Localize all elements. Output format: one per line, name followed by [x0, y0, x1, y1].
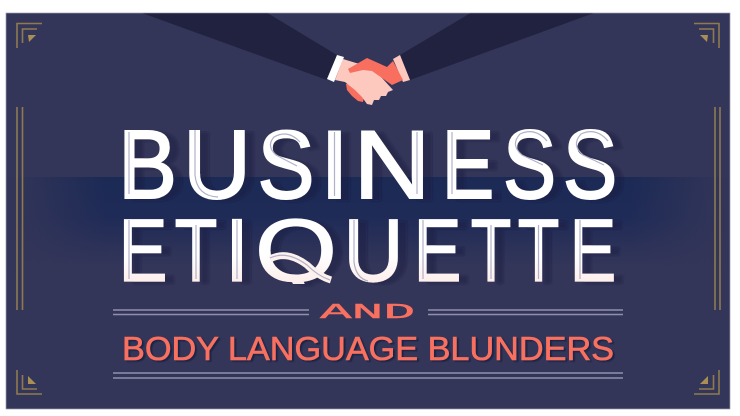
title: ETIQUETTE: T: [518, 200, 559, 300]
icon: handshake: [327, 55, 410, 105]
title: ETIQUETTE: I: [224, 201, 250, 301]
title: BUSINESS: E: [442, 110, 494, 219]
title: BUSINESS: B: [118, 110, 177, 219]
title: BUSINESS: S: [503, 111, 556, 219]
icon: right sleeve: [400, 13, 593, 80]
icon: left cuff: [327, 55, 344, 82]
title: ETIQUETTE: Q: [255, 200, 337, 300]
divider: bottom rules: [113, 373, 623, 378]
icon: bottom-left corner ornament: [17, 370, 42, 394]
icon: pale hand: [335, 59, 393, 105]
title detail: Q tail swash: [270, 256, 331, 280]
title: ETIQUETTE: E: [413, 202, 462, 301]
title: ETIQUETTE: [124, 218, 623, 286]
icon: top-left corner ornament: [17, 24, 42, 48]
subtitle: BODY LANGUAGE BLUNDERS: BODY LANGUAGE BLUNDERS: [122, 331, 614, 368]
right double rule: [715, 107, 720, 310]
title: BUSINESS: I: [319, 111, 350, 219]
title: BUSINESS: U: [183, 112, 251, 219]
icon: right cuff: [393, 55, 410, 82]
icon: coral back fingers: [346, 83, 364, 102]
divider: rules right of AND: [428, 310, 623, 314]
icon: top-right corner ornament: [694, 24, 719, 48]
title: ETIQUETTE: E: [118, 202, 168, 301]
icon: left sleeve: [143, 13, 337, 80]
title: ETIQUETTE: E: [570, 200, 616, 300]
title: BUSINESS: [118, 110, 617, 219]
title: ETIQUETTE: T: [471, 201, 511, 300]
panel: dark horizontal band: [40, 177, 696, 250]
title: ETIQUETTE: U: [343, 202, 404, 301]
title: BUSINESS: S: [563, 110, 617, 219]
title: BUSINESS: N: [353, 110, 431, 219]
title: ETIQUETTE: T: [175, 200, 217, 300]
icon: bottom-right corner ornament: [694, 370, 719, 394]
divider: rules left of AND: [113, 310, 309, 314]
icon: coral hand: [348, 58, 403, 85]
left double rule: [17, 107, 22, 310]
subtitle: AND: AND: [320, 302, 415, 325]
title: BUSINESS: S: [258, 111, 314, 219]
